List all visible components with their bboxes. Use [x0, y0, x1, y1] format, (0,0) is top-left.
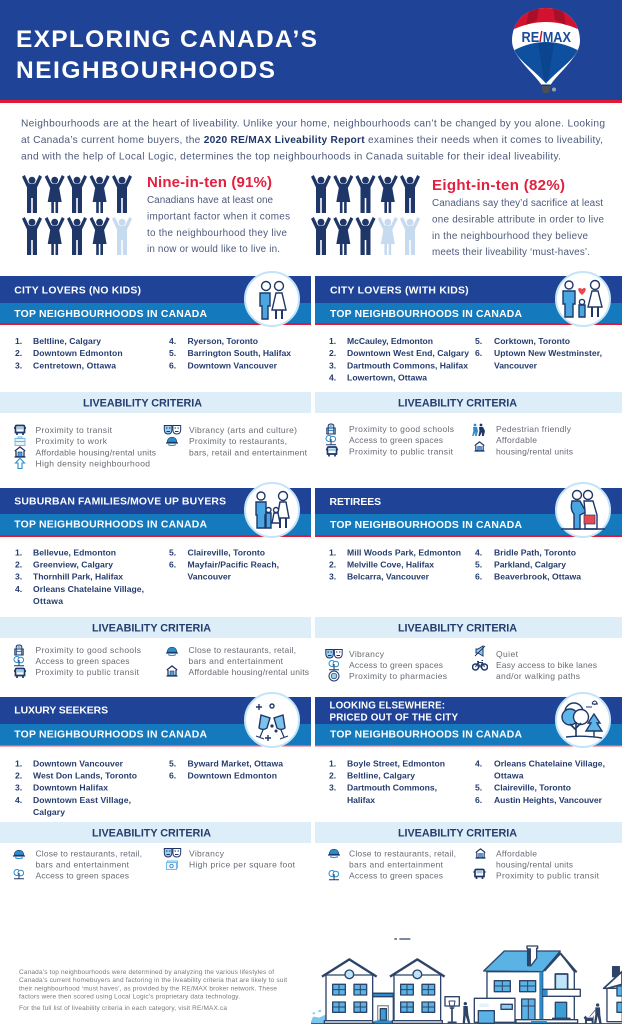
panel header: TOP NEIGHBOURHOODS IN CANADA	[14, 520, 207, 530]
top neighbourhoods list: Greenview, Calgary	[33, 560, 113, 570]
criteria list: bars and entertainment	[349, 860, 444, 870]
panel: looking elsewhere	[315, 693, 622, 880]
stat: nine in ten	[147, 174, 290, 255]
top neighbourhoods list: 3.	[329, 572, 336, 582]
title: NEIGHBOURHOODS	[16, 57, 275, 84]
dog walker	[584, 1003, 602, 1023]
criteria heading: LIVEABILITY CRITERIA	[398, 827, 517, 839]
top neighbourhoods list: 3.	[15, 782, 22, 792]
top neighbourhoods list: 3.	[329, 360, 336, 370]
top neighbourhoods list: Bridle Path, Toronto	[494, 547, 576, 557]
criteria list: Proximity to pharmacies	[349, 671, 447, 681]
top neighbourhoods list: 1.	[15, 547, 22, 557]
stat: nine in ten: to the neighbourhood they live	[147, 228, 288, 239]
top neighbourhoods list: Mayfair/Pacific Reach,	[188, 560, 279, 570]
top neighbourhoods list: 5.	[475, 782, 482, 792]
intro paragraph: and with the help of Local Logic, determines the top neighbourhoods in Canada suitable for their ideal liveability.	[21, 152, 561, 162]
stat: nine in ten: Canadians have at least one	[147, 195, 274, 206]
footnote: Canada’s top neighbourhoods were determined by analyzing the various lifestyles of	[19, 969, 274, 976]
top neighbourhoods list: 1.	[15, 758, 22, 768]
top neighbourhoods list: Downtown Edmonton	[188, 770, 277, 780]
title	[16, 26, 317, 84]
top neighbourhoods list: 2.	[329, 770, 336, 780]
person walking	[463, 1002, 470, 1023]
top neighbourhoods list: Downtown East Village,	[33, 795, 131, 805]
top neighbourhoods list: Uptown New Westminster,	[494, 348, 602, 358]
footnote: Canada’s current homebuyers and factoring in the liveability criteria that are likely to suit	[19, 977, 287, 984]
panel header	[315, 697, 622, 746]
top neighbourhoods list: 6.	[169, 560, 176, 570]
top neighbourhoods list: Bellevue, Edmonton	[33, 547, 116, 557]
footnote: For the full list of liveability criteria in each category, visit RE/MAX.ca	[19, 1005, 227, 1012]
criteria list	[328, 848, 600, 880]
criteria list: Close to restaurants, retail,	[36, 848, 142, 858]
top neighbourhoods list: 3.	[329, 782, 336, 792]
stat: nine in ten: important factor when it comes	[147, 212, 290, 222]
intro paragraph: Neighbourhoods are at the heart of liveability. Unlike your home, neighbourhoods can’t be changed by you alone. Looking	[21, 118, 605, 130]
panel header: LUXURY SEEKERS	[14, 706, 108, 717]
panel header: TOP NEIGHBOURHOODS IN CANADA	[14, 309, 207, 320]
criteria list: Proximity to public transit	[349, 446, 454, 456]
top neighbourhoods list: 1.	[329, 336, 336, 346]
top neighbourhoods list: Beltline, Calgary	[33, 336, 101, 346]
icon: champagne glasses	[245, 693, 299, 747]
top neighbourhoods list: West Don Lands, Toronto	[33, 770, 137, 780]
footnote: their neighbourhood ‘must haves’, as provided by the RE/MAX broker network. These	[19, 986, 277, 992]
criteria list: Close to restaurants, retail,	[188, 645, 296, 655]
top neighbourhoods list: 6.	[475, 572, 482, 582]
criteria list: Affordable housing/rental units	[36, 448, 156, 458]
criteria list: Vibrancy	[349, 649, 385, 659]
top neighbourhoods list	[15, 336, 291, 370]
criteria list: and/or walking paths	[496, 671, 580, 681]
top neighbourhoods list: Downtown Edmonton	[33, 348, 123, 358]
icon: trees	[556, 693, 610, 747]
criteria heading	[315, 822, 622, 843]
criteria list: Access to green spaces	[349, 660, 443, 670]
top neighbourhoods list: 4.	[169, 336, 176, 346]
top neighbourhoods list: Austin Heights, Vancouver	[494, 795, 603, 805]
top neighbourhoods list: 2.	[15, 770, 22, 780]
pictogram: nine in ten people	[22, 175, 132, 255]
criteria list: Affordable	[496, 435, 537, 445]
stat: nine in ten: in now or would like to live in.	[147, 244, 280, 255]
top neighbourhoods list: 5.	[169, 547, 176, 557]
criteria heading	[315, 617, 622, 638]
criteria list: bars and entertainment	[36, 860, 130, 870]
criteria list: Easy access to bike lanes	[496, 660, 597, 670]
criteria heading: LIVEABILITY CRITERIA	[83, 397, 202, 409]
top neighbourhoods list: Mill Woods Park, Edmonton	[347, 547, 461, 557]
criteria list: Proximity to transit	[36, 425, 113, 435]
top neighbourhoods list: Ottawa	[494, 770, 524, 780]
top neighbourhoods list: 5.	[475, 336, 482, 346]
top neighbourhoods list: Downtown West End, Calgary	[347, 348, 469, 358]
top neighbourhoods list: Calgary	[33, 807, 65, 817]
criteria list: Affordable housing/rental units	[188, 667, 309, 677]
criteria list: Affordable	[496, 848, 537, 858]
top neighbourhoods list: Halifax	[347, 795, 375, 805]
top neighbourhoods list: 5.	[169, 758, 176, 768]
intro paragraph	[21, 118, 605, 162]
top neighbourhoods list: 2.	[329, 560, 336, 570]
panel: city lovers with kids	[315, 272, 622, 456]
panel: city lovers no kids	[0, 272, 311, 468]
panel header: TOP NEIGHBOURHOODS IN CANADA	[330, 309, 522, 320]
criteria list: High density neighbourhood	[36, 458, 150, 468]
right edge house	[604, 967, 622, 1022]
top neighbourhoods list: Belcarra, Vancouver	[347, 572, 430, 582]
top neighbourhoods list: 2.	[15, 560, 22, 570]
top neighbourhoods list: Downtown Vancouver	[33, 758, 124, 768]
panel: retirees	[315, 483, 622, 681]
panel header	[0, 697, 311, 746]
panel header: SUBURBAN FAMILIES/MOVE UP BUYERS	[14, 496, 226, 508]
top neighbourhoods list: Downtown Halifax	[33, 782, 108, 792]
criteria list	[13, 848, 296, 880]
criteria list: Pedestrian friendly	[496, 424, 572, 434]
top neighbourhoods list: 2.	[329, 348, 336, 358]
criteria list: housing/rental units	[496, 446, 573, 456]
top neighbourhoods list	[329, 336, 602, 382]
panel header: RETIREES	[330, 497, 381, 508]
house two	[390, 959, 445, 1023]
panel header: LOOKING ELSEWHERE:	[330, 701, 445, 712]
top neighbourhoods list: Orleans Chatelaine Village,	[494, 758, 605, 768]
top neighbourhoods list: Downtown Vancouver	[188, 360, 278, 370]
top neighbourhoods list: Claireville, Toronto	[494, 782, 571, 792]
criteria heading: LIVEABILITY CRITERIA	[92, 622, 211, 634]
illustration: houses street	[311, 939, 622, 1024]
top neighbourhoods list: Dartmouth Commons,	[347, 782, 437, 792]
criteria list: Proximity to good schools	[349, 424, 454, 434]
criteria heading	[0, 822, 311, 843]
intro paragraph: at Canada’s current home buyers, the 2020 RE/MAX Liveability Report examines their needs when it comes to liveability,	[21, 135, 603, 146]
top neighbourhoods list	[329, 547, 581, 582]
top neighbourhoods list: Vancouver	[494, 360, 538, 370]
stat: eight in ten: one desirable attribute in order to live	[432, 214, 604, 226]
basketball hoop	[445, 997, 459, 1022]
criteria list: Proximity to work	[36, 436, 108, 446]
criteria heading	[0, 617, 311, 638]
criteria list: housing/rental units	[496, 860, 573, 870]
top neighbourhoods list: 5.	[169, 348, 176, 358]
criteria list: Access to green spaces	[349, 435, 443, 445]
top neighbourhoods list: Claireville, Toronto	[188, 547, 265, 557]
panel header	[0, 276, 311, 325]
panel header	[315, 276, 622, 325]
top neighbourhoods list: Centretown, Ottawa	[33, 360, 116, 370]
panel: suburban families	[0, 483, 311, 678]
panel header	[0, 488, 311, 537]
criteria list	[326, 646, 597, 681]
panel header: PRICED OUT OF THE CITY	[330, 713, 458, 724]
panel: luxury seekers	[0, 693, 311, 880]
criteria heading	[315, 392, 622, 413]
title: EXPLORING CANADA’S	[16, 26, 317, 53]
criteria list: bars and entertainment	[188, 656, 284, 666]
icon: elderly couple	[556, 483, 610, 537]
large house	[474, 946, 580, 1023]
top neighbourhoods list: Ryerson, Toronto	[188, 336, 258, 346]
stat: eight in ten: in the neighbourhood they believe	[432, 231, 588, 242]
panel header: TOP NEIGHBOURHOODS IN CANADA	[330, 520, 522, 531]
top neighbourhoods list: Beltline, Calgary	[347, 770, 415, 780]
icon: RE/MAX balloon logo: RE/MAX	[522, 29, 571, 46]
top neighbourhoods list: Parkland, Calgary	[494, 560, 566, 570]
top neighbourhoods list: 3.	[15, 572, 22, 582]
criteria list: Access to green spaces	[36, 870, 129, 880]
footnote: factors were then scored using Local Logic’s proprietary data technology.	[19, 994, 240, 1000]
icon: family	[245, 483, 299, 537]
top neighbourhoods list: McCauley, Edmonton	[347, 336, 433, 346]
top neighbourhoods list: 4.	[15, 584, 22, 594]
stat: eight in ten: meets their liveability ‘must-haves’.	[432, 247, 590, 258]
top neighbourhoods list: Vancouver	[188, 572, 232, 582]
top neighbourhoods list: 4.	[15, 795, 22, 805]
top neighbourhoods list: 5.	[475, 560, 482, 570]
criteria list: Proximity to public transit	[496, 870, 600, 880]
criteria list: Proximity to good schools	[36, 645, 141, 655]
criteria list: bars, retail and entertainment	[189, 448, 308, 458]
top neighbourhoods list: 1.	[329, 547, 336, 557]
criteria list: High price per square foot	[189, 860, 296, 870]
criteria heading: LIVEABILITY CRITERIA	[92, 827, 211, 839]
criteria heading: LIVEABILITY CRITERIA	[398, 622, 517, 634]
house one	[322, 959, 377, 1023]
icon: family with child and heart	[556, 272, 610, 326]
top neighbourhoods list	[15, 547, 279, 606]
stat: eight in ten: Canadians say they’d sacrifice at least	[432, 198, 603, 209]
icon: couple	[245, 272, 299, 326]
top neighbourhoods list: Byward Market, Ottawa	[188, 758, 283, 768]
footnote	[19, 969, 287, 1012]
criteria list	[326, 424, 573, 456]
top neighbourhoods list	[15, 758, 283, 817]
criteria list: Proximity to public transit	[36, 667, 140, 677]
criteria list	[14, 645, 309, 678]
header band	[0, 0, 622, 103]
top neighbourhoods list: 6.	[169, 770, 176, 780]
criteria list: Access to green spaces	[36, 656, 130, 666]
panel header	[315, 488, 622, 537]
criteria heading	[0, 392, 311, 413]
top neighbourhoods list: 2.	[15, 348, 22, 358]
panel header: CITY LOVERS (NO KIDS)	[14, 286, 141, 297]
top neighbourhoods list: 6.	[169, 360, 176, 370]
criteria list: Quiet	[496, 649, 519, 659]
top neighbourhoods list: 1.	[329, 758, 336, 768]
top neighbourhoods list: Orleans Chatelaine Village,	[33, 584, 144, 594]
top neighbourhoods list	[329, 758, 605, 805]
top neighbourhoods list: Thornhill Park, Halifax	[33, 572, 123, 582]
criteria list: Close to restaurants, retail,	[349, 848, 456, 858]
stat: eight in ten: Eight-in-ten (82%)	[432, 177, 565, 194]
top neighbourhoods list: 6.	[475, 348, 482, 358]
top neighbourhoods list: Beaverbrook, Ottawa	[494, 572, 581, 582]
criteria list: Vibrancy (arts and culture)	[189, 425, 297, 435]
top neighbourhoods list: 4.	[475, 758, 482, 768]
top neighbourhoods list: 4.	[329, 372, 336, 382]
pictogram: eight in ten people	[311, 175, 420, 255]
stat: eight in ten	[432, 177, 604, 258]
criteria list: Proximity to restaurants,	[189, 436, 287, 446]
top neighbourhoods list: 4.	[475, 547, 482, 557]
top neighbourhoods list: Lowertown, Ottawa	[347, 372, 427, 382]
top neighbourhoods list: Melville Cove, Halifax	[347, 560, 434, 570]
criteria list	[14, 425, 308, 468]
icon: RE/MAX balloon logo	[510, 6, 582, 93]
stat: nine in ten: Nine-in-ten (91%)	[147, 174, 272, 191]
top neighbourhoods list: Dartmouth Commons, Halifax	[347, 360, 468, 370]
criteria list: Vibrancy	[189, 848, 225, 858]
top neighbourhoods list: Ottawa	[33, 596, 63, 606]
panel header: TOP NEIGHBOURHOODS IN CANADA	[330, 730, 522, 741]
criteria heading: LIVEABILITY CRITERIA	[398, 397, 517, 409]
top neighbourhoods list: Boyle Street, Edmonton	[347, 758, 445, 768]
panel header: TOP NEIGHBOURHOODS IN CANADA	[14, 730, 207, 741]
top neighbourhoods list: 3.	[15, 360, 22, 370]
criteria list: Access to green spaces	[349, 870, 443, 880]
top neighbourhoods list: 1.	[15, 336, 22, 346]
panel header: CITY LOVERS (WITH KIDS)	[330, 286, 469, 297]
top neighbourhoods list: 6.	[475, 795, 482, 805]
top neighbourhoods list: Barrington South, Halifax	[188, 348, 291, 358]
top neighbourhoods list: Corktown, Toronto	[494, 336, 570, 346]
